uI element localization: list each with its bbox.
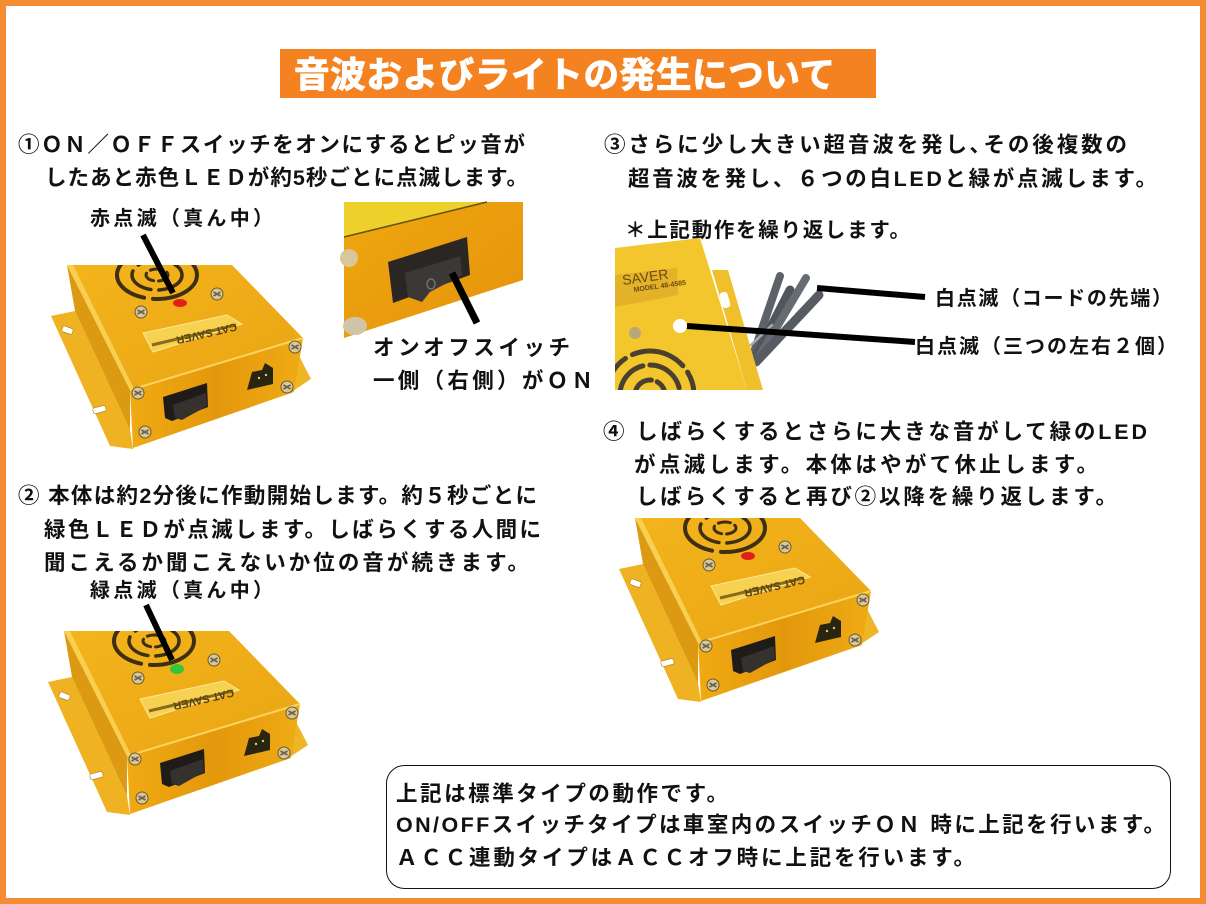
step 1 text [18, 132, 528, 190]
step 4 text: ④ しばらくするとさらに大きな音がして緑のLED [603, 419, 1147, 444]
note box: 上記は標準タイプの動作です。 [396, 782, 728, 806]
device photo: green LED [48, 605, 308, 815]
step 1 text: ①ＯＮ／ＯＦＦスイッチをオンにするとピッ音が [18, 132, 525, 157]
switch caption [373, 336, 593, 393]
green blink label: 緑点滅（真ん中） [90, 578, 273, 602]
note box [386, 766, 1170, 888]
white LED label: 白点滅（三つの左右２個） [915, 334, 1177, 358]
red blink label: 赤点滅（真ん中） [90, 206, 273, 230]
device photo: step 4: CAT SAVER [743, 573, 806, 599]
device photo: green LED: CAT SAVER [172, 686, 235, 712]
step 2 text: 緑色ＬＥＤが点滅します。しばらくする人間に [44, 517, 541, 542]
switch caption: オンオフスイッチ [373, 336, 570, 360]
step 2 text: 聞こえるか聞こえないか位の音が続きます。 [44, 550, 529, 575]
switch caption: 一側（右側）がＯＮ [373, 368, 593, 393]
step 1 text: したあと赤色ＬＥＤが約5秒ごとに点滅します。 [45, 165, 528, 190]
step 4 text: が点滅します。本体はやがて休止します。 [634, 452, 1098, 477]
device photo: red LED [51, 235, 311, 449]
repeat note: ＊上記動作を繰り返します。 [625, 219, 910, 242]
white LED photo with cables: SAVER [621, 266, 669, 288]
step 3 text [604, 133, 1157, 191]
note box: ON/OFFスイッチタイプは車室内のスイッチＯＮ 時に上記を行います。 [396, 813, 1165, 837]
cable tip label: 白点滅（コードの先端） [935, 286, 1172, 310]
white LED photo with cables: MODEL 48-4585 [633, 280, 687, 294]
switch close-up photo [340, 202, 523, 338]
device photo: step 4 [619, 504, 879, 702]
step 3 text: 超音波を発し、６つの白LEDと緑が点滅します。 [628, 166, 1157, 191]
note box: ＡＣＣ連動タイプはＡＣＣオフ時に上記を行います。 [396, 846, 975, 870]
step 4 text: しばらくすると再び②以降を繰り返します。 [636, 485, 1117, 509]
step 4 text [603, 419, 1147, 509]
title: 音波およびライトの発生について [294, 55, 835, 95]
step 3 text: ③さらに少し大きい超音波を発し､その後複数の [604, 133, 1127, 157]
white LED photo with cables [615, 238, 926, 390]
device photo: red LED: CAT SAVER [175, 320, 238, 346]
step 2 text: ② 本体は約2分後に作動開始します。約５秒ごとに [18, 483, 537, 508]
step 2 text [18, 483, 541, 575]
